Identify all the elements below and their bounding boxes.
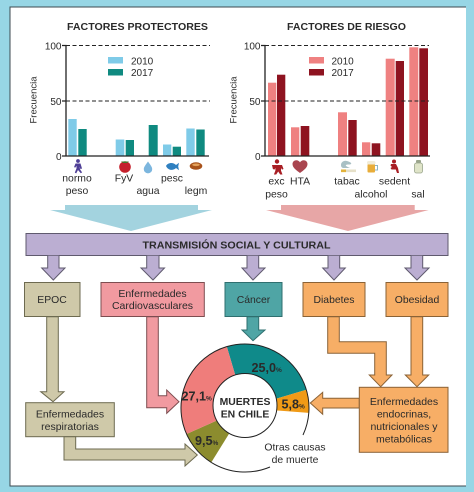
icon: cigarette — [341, 161, 356, 172]
category labels: tabac — [334, 176, 360, 188]
bars: tabac — [338, 112, 357, 156]
icon: apple — [119, 161, 131, 173]
bars: FyV — [116, 140, 134, 156]
arrow: risk factors into transmission — [266, 205, 429, 231]
y axis labels: 50 — [50, 97, 62, 108]
category labels: exc — [268, 176, 285, 188]
label: otras causas de muerte: Otras causas — [264, 442, 326, 454]
legend — [108, 56, 154, 79]
category labels: normo — [62, 174, 92, 184]
arrow: diabetes to metabolic box — [328, 317, 392, 387]
heading: transmision: TRANSMISIÓN SOCIAL Y CULTURAL — [142, 240, 331, 252]
label: otras causas de muerte: de muerte — [272, 455, 319, 466]
box: EPOC — [24, 282, 80, 316]
category labels: sedent — [379, 176, 410, 188]
box: enfermedades cardiovasculares — [101, 282, 204, 316]
box: cancer — [225, 282, 282, 316]
donut chart: muertes en Chile — [181, 344, 309, 472]
category labels: agua — [136, 186, 160, 197]
icon: fish — [166, 163, 179, 170]
arrow: metabolic box to donut — [310, 392, 359, 414]
arrow: cardiovascular to donut — [147, 317, 179, 413]
box: cancer: Cáncer — [237, 295, 271, 306]
category labels: FyV — [115, 174, 133, 184]
legend: 2017 — [131, 68, 154, 79]
icon: beer mug — [367, 161, 378, 172]
arrow: cancer to donut — [242, 317, 265, 341]
box: enfermedades endocrinas — [359, 387, 448, 452]
box: enfermedades endocrinas: endocrinas, — [377, 408, 431, 420]
arrow: EPOC to respiratory — [41, 317, 64, 402]
y axis labels: 50 — [249, 97, 261, 108]
legend: 2010 — [332, 56, 354, 68]
arrow: obesidad to metabolic box — [405, 317, 429, 387]
category labels: legm — [185, 186, 207, 197]
box: enfermedades cardiovasculares: Cardiovasculares — [112, 300, 193, 312]
bars: pesc — [163, 144, 181, 156]
y axis labels: 0 — [255, 152, 261, 163]
category labels: pesc — [161, 174, 183, 184]
box: enfermedades endocrinas: metabólicas — [376, 434, 432, 446]
icon: seated person — [390, 160, 399, 173]
category labels: HTA — [290, 176, 310, 188]
y axis title: Frecuencia — [228, 76, 240, 124]
center label: MUERTES — [220, 397, 270, 408]
category labels — [62, 174, 207, 197]
legend — [309, 56, 354, 79]
value: 9,5%: 9,5% — [195, 434, 219, 448]
box: obesidad — [386, 282, 448, 316]
bars: legm — [186, 128, 205, 156]
segment: endocrine 5,8% — [245, 390, 309, 413]
value: 27,1%: 27,1% — [182, 390, 212, 404]
bar chart: factores protectores — [28, 42, 210, 197]
bars: sal — [409, 47, 428, 156]
panel: transmision social y cultural — [26, 234, 448, 256]
arrow: transmission to diabetes — [323, 256, 345, 280]
box: enfermedades respiratorias — [26, 403, 114, 437]
legend: 2010 — [131, 56, 154, 68]
icon: heart — [292, 160, 308, 173]
arrow: transmission to cardiovascular — [141, 256, 164, 280]
box: EPOC: EPOC — [37, 295, 67, 306]
y axis labels: 0 — [56, 152, 62, 163]
y axis labels — [45, 42, 62, 163]
category labels: peso — [66, 186, 88, 197]
category labels: peso — [265, 190, 288, 200]
icon: salt shaker — [414, 160, 422, 173]
box: enfermedades respiratorias: Enfermedades — [36, 408, 104, 420]
bars: agua — [149, 125, 158, 156]
category labels — [265, 176, 425, 200]
y axis labels: 100 — [244, 42, 261, 52]
box: enfermedades endocrinas: Enfermedades — [370, 396, 438, 408]
segment: respiratory 9,5% — [186, 408, 245, 462]
arrow: transmission to cancer — [242, 256, 265, 280]
box: diabetes — [303, 282, 365, 316]
bars: alcohol — [362, 142, 380, 156]
y axis labels — [244, 42, 261, 163]
icon: legumes — [190, 162, 202, 170]
center circle — [213, 374, 277, 438]
bar chart: factores de riesgo — [228, 42, 430, 200]
value: 25,0%: 25,0% — [252, 361, 282, 375]
heading: factores protectores: FACTORES PROTECTORES — [67, 22, 208, 33]
heading: factores de riesgo: FACTORES DE RIESGO — [287, 22, 406, 33]
segment: cancer 25,0% — [227, 344, 306, 408]
icon: person walking — [74, 159, 82, 173]
arrow: transmission to obesidad — [405, 256, 429, 280]
bars: normo peso — [68, 119, 87, 156]
outline arc — [181, 344, 309, 462]
legend: 2017 — [332, 68, 354, 79]
category labels: alcohol — [355, 190, 387, 200]
bars: exc peso — [268, 75, 285, 156]
icon: overweight person — [272, 159, 284, 174]
box: enfermedades cardiovasculares: Enfermedades — [118, 288, 187, 300]
arrow: transmission to EPOC — [42, 256, 65, 280]
donut chart: muertes en Chile: EN CHILE — [221, 410, 269, 420]
box: diabetes: Diabetes — [313, 295, 355, 306]
y axis title: Frecuencia — [28, 76, 40, 124]
segment: cardiovascular 27,1% — [181, 347, 245, 434]
category labels: sal — [411, 190, 425, 200]
label: otras causas de muerte — [264, 442, 326, 466]
outline arc lower — [211, 462, 270, 472]
arrow: protective factors into transmission — [50, 205, 212, 231]
bars: sedent — [386, 59, 404, 156]
box: enfermedades respiratorias: respiratorias — [41, 421, 99, 433]
icon: water drop — [144, 162, 152, 173]
y axis labels: 100 — [45, 42, 62, 52]
box: enfermedades endocrinas: nutricionales y — [370, 421, 438, 433]
arrow: respiratory to donut — [64, 437, 197, 466]
value: 5,8%: 5,8% — [282, 398, 305, 412]
box: obesidad: Obesidad — [395, 295, 439, 306]
bars: HTA — [291, 126, 309, 156]
